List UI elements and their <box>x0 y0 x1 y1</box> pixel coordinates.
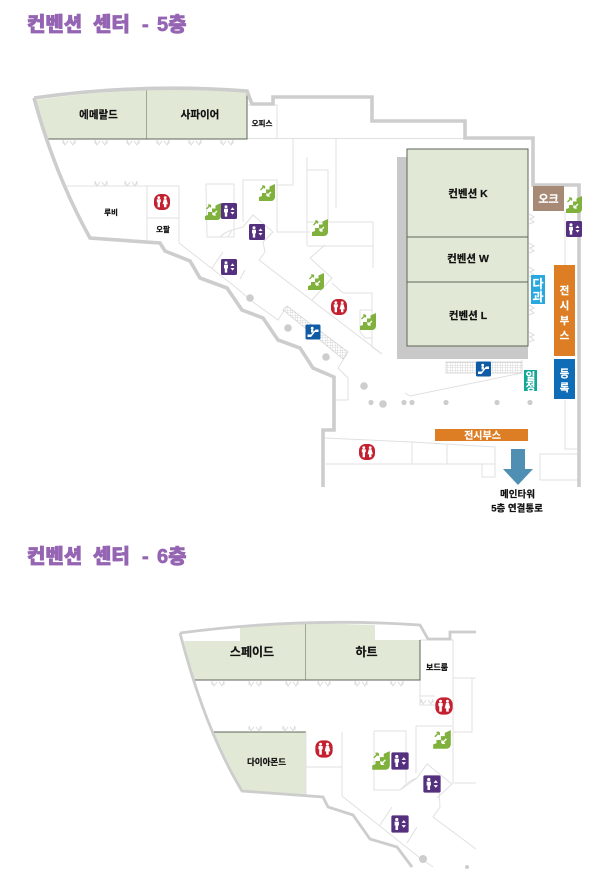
icons: escalators <box>306 324 491 376</box>
escalator treads <box>283 306 522 373</box>
label: 전시부스 horizontal: 전시부스 <box>464 430 501 442</box>
room: 스페이드: 스페이드 <box>230 645 274 659</box>
outer wall <box>180 622 476 867</box>
label: 전시부스 horizontal <box>435 429 528 442</box>
title: 6F heading: 6층 <box>157 545 187 568</box>
title: 5F heading: 5층 <box>157 13 187 36</box>
room: 컨벤션 K <box>407 149 528 237</box>
label: 등록 <box>554 359 575 399</box>
title: 6F heading: 센터 <box>93 545 130 568</box>
label: 다과 <box>531 275 545 304</box>
label: 오크 <box>533 186 564 211</box>
label: 일정 <box>524 370 537 393</box>
label: 등록: 록 <box>560 382 570 394</box>
room: 루비: 루비 <box>104 207 118 217</box>
title: 6F heading: 컨벤션 <box>27 545 82 568</box>
label: 등록: 등 <box>560 368 570 380</box>
columns <box>246 294 533 408</box>
columns <box>419 855 469 869</box>
label: 일정: 정 <box>526 381 535 393</box>
room: 오팔: 오팔 <box>156 224 170 234</box>
label: 전시부스 vertical: 전 <box>560 285 569 297</box>
room: 컨벤션 L <box>407 282 528 346</box>
text: main tower connection: 메인타워 <box>500 488 535 500</box>
text: main tower connection <box>491 488 543 514</box>
room: 보드룸: 보드룸 <box>426 663 449 672</box>
icons: elevators <box>391 752 441 833</box>
room: 사파이어: 사파이어 <box>181 108 219 121</box>
title: 5F heading: 컨벤션 <box>27 13 82 36</box>
label: 다과: 과 <box>532 289 544 304</box>
icons: restrooms <box>315 697 453 758</box>
label: 전시부스 vertical: 스 <box>560 330 570 342</box>
room: 스페이드 <box>184 623 306 680</box>
panel: 5F floor plan <box>34 88 582 514</box>
text: main tower connection: 5층 연결통로 <box>491 502 543 514</box>
room: 다이아몬드 <box>211 732 306 796</box>
label: 전시부스 vertical: 시 <box>560 300 569 312</box>
title: 6F heading: - <box>142 546 149 568</box>
interior walkway lines <box>306 640 476 867</box>
icons: stairs <box>372 730 451 770</box>
room: 다이아몬드: 다이아몬드 <box>247 757 286 767</box>
interior walkway lines <box>48 105 578 480</box>
room: 에메랄드: 에메랄드 <box>79 108 118 121</box>
room: 컨벤션 W <box>407 237 528 282</box>
label: 전시부스 vertical: 부 <box>560 315 570 327</box>
room: 컨벤션 K: 컨벤션 K <box>448 187 488 200</box>
icons: restrooms <box>154 194 375 460</box>
doors <box>63 140 534 342</box>
arrow: to main tower <box>503 449 533 485</box>
label: 오크: 오크 <box>538 192 559 206</box>
doors <box>212 681 433 731</box>
room: 하트: 하트 <box>355 645 378 659</box>
label: 전시부스 vertical <box>554 265 575 356</box>
room: 컨벤션 W: 컨벤션 W <box>447 252 489 265</box>
room: 하트 <box>306 623 420 680</box>
room: 오피스: 오피스 <box>252 119 272 128</box>
title: 5F heading: - <box>142 14 149 36</box>
label: 다과: 다 <box>532 276 544 291</box>
room: 사파이어 <box>147 90 247 139</box>
label: 일정: 일 <box>526 370 535 383</box>
icons: stairs <box>205 184 582 330</box>
shadow behind convention halls <box>397 157 528 359</box>
panel: 6F floor plan <box>180 622 476 869</box>
room: 컨벤션 L: 컨벤션 L <box>449 309 488 322</box>
icons: elevators <box>221 203 582 275</box>
outer wall <box>34 88 579 487</box>
room: 에메랄드 <box>36 90 147 139</box>
title: 5F heading: 센터 <box>93 13 130 36</box>
